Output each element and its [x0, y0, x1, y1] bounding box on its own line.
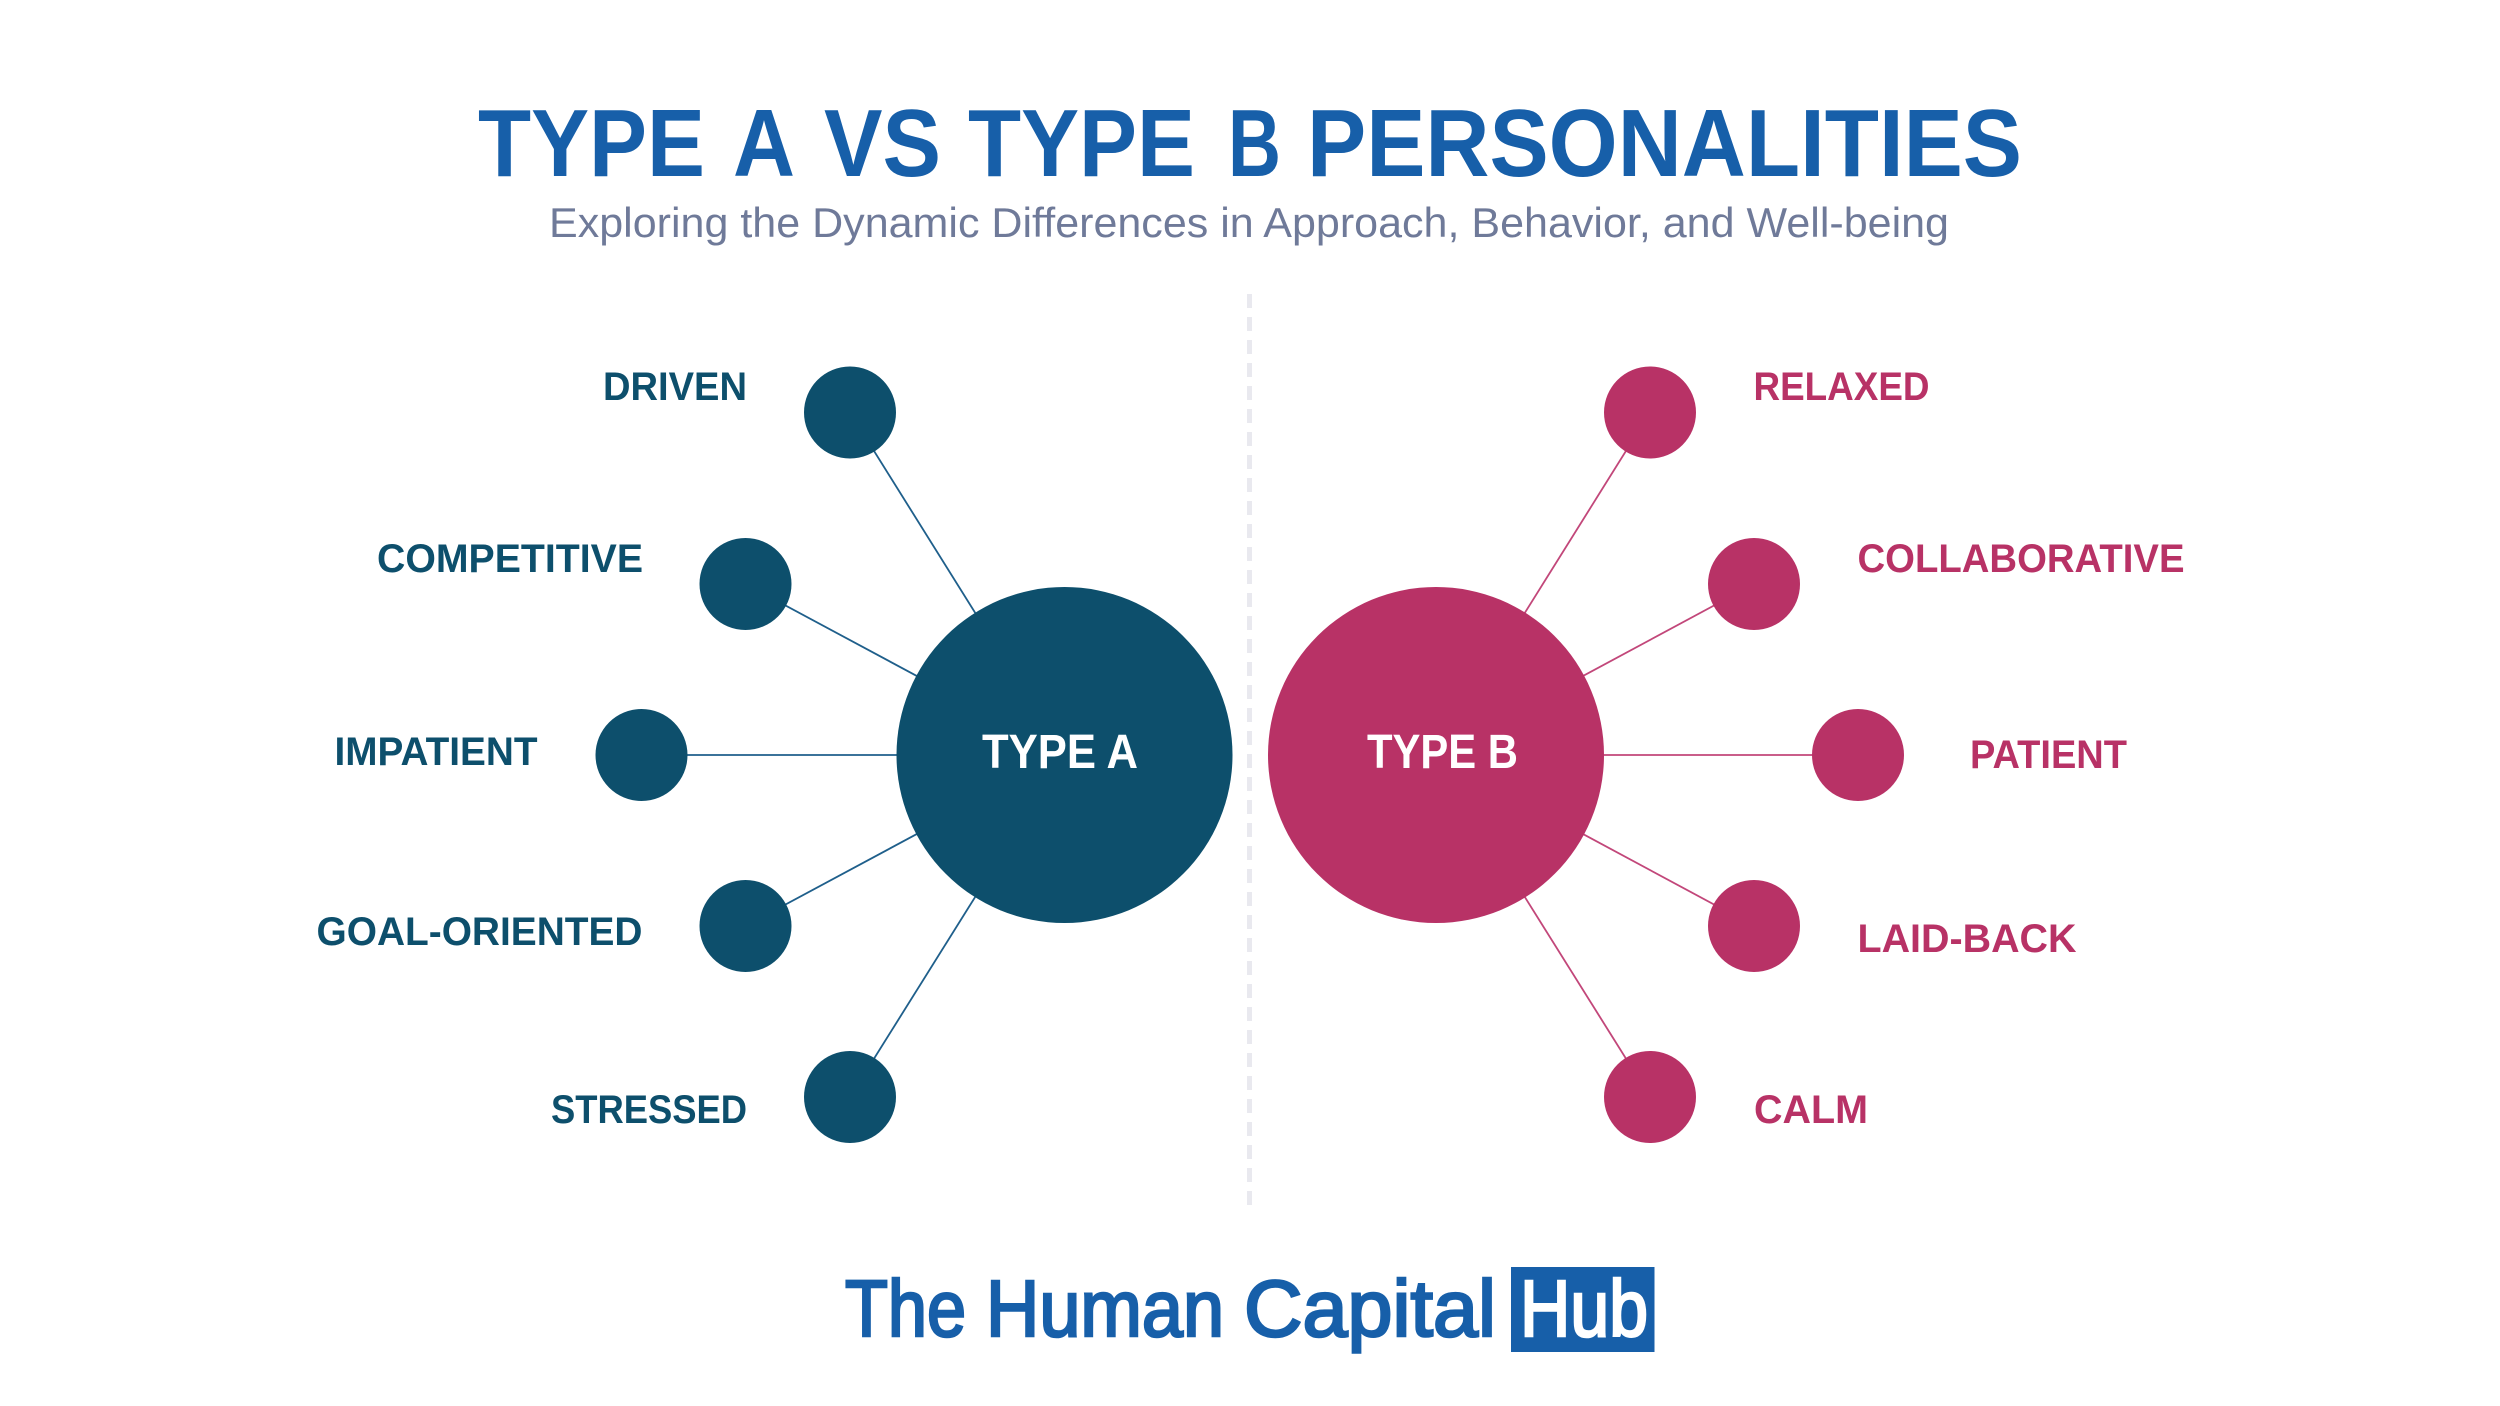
hub circle: type B [1268, 587, 1604, 923]
title: PERSONALITIES [1307, 90, 2022, 197]
logo: The Human Capital Hub: Hub [1520, 1264, 1648, 1353]
trait: relaxed: RELAXED [1754, 365, 1930, 409]
logo: The Human Capital Hub [845, 1264, 1654, 1353]
trait: calm [1604, 1051, 1868, 1143]
trait: stressed [551, 1051, 896, 1143]
trait: relaxed [1604, 365, 1930, 458]
trait: collaborative: COLLABORATIVE [1858, 537, 2184, 581]
hub circle: type B: TYPE B [1367, 726, 1518, 779]
title: B [1228, 90, 1281, 197]
trait: competitive [377, 537, 792, 630]
trait: driven [603, 365, 896, 458]
logo: The Human Capital Hub: Capital [1244, 1264, 1496, 1353]
trait: competitive: COMPETITIVE [377, 537, 643, 581]
trait: patient: PATIENT [1970, 733, 2127, 777]
connector lines: type B [1436, 412, 1858, 1097]
title: TYPE [968, 90, 1195, 197]
panel: type A diagram [316, 365, 1232, 1143]
title: TYPE [478, 90, 705, 197]
logo: The Human Capital Hub: Human [986, 1264, 1224, 1353]
title: A [733, 90, 795, 197]
trait: impatient [334, 709, 688, 801]
subtitle: Exploring the Dynamic Differences in Approach, Behavior, and Well-being [549, 199, 1949, 246]
trait: laid-back [1708, 880, 2077, 972]
trait: laid-back: LAID-BACK [1858, 917, 2077, 961]
title [478, 90, 2022, 197]
trait: goal-oriented [316, 880, 792, 972]
trait: stressed: STRESSED [551, 1088, 747, 1132]
title: VS [824, 90, 941, 197]
trait: patient [1812, 709, 2127, 801]
hub circle: type A: TYPE A [982, 726, 1138, 779]
trait: driven: DRIVEN [603, 365, 747, 409]
panel: type B diagram [1268, 365, 2184, 1143]
trait: calm: CALM [1754, 1088, 1868, 1132]
logo: The Human Capital Hub: The [845, 1264, 966, 1353]
trait: impatient: IMPATIENT [334, 730, 538, 774]
trait: collaborative [1708, 537, 2184, 630]
trait: goal-oriented: GOAL-ORIENTED [316, 910, 642, 954]
hub circle: type A [896, 587, 1232, 923]
connector lines: type A [642, 412, 1064, 1097]
